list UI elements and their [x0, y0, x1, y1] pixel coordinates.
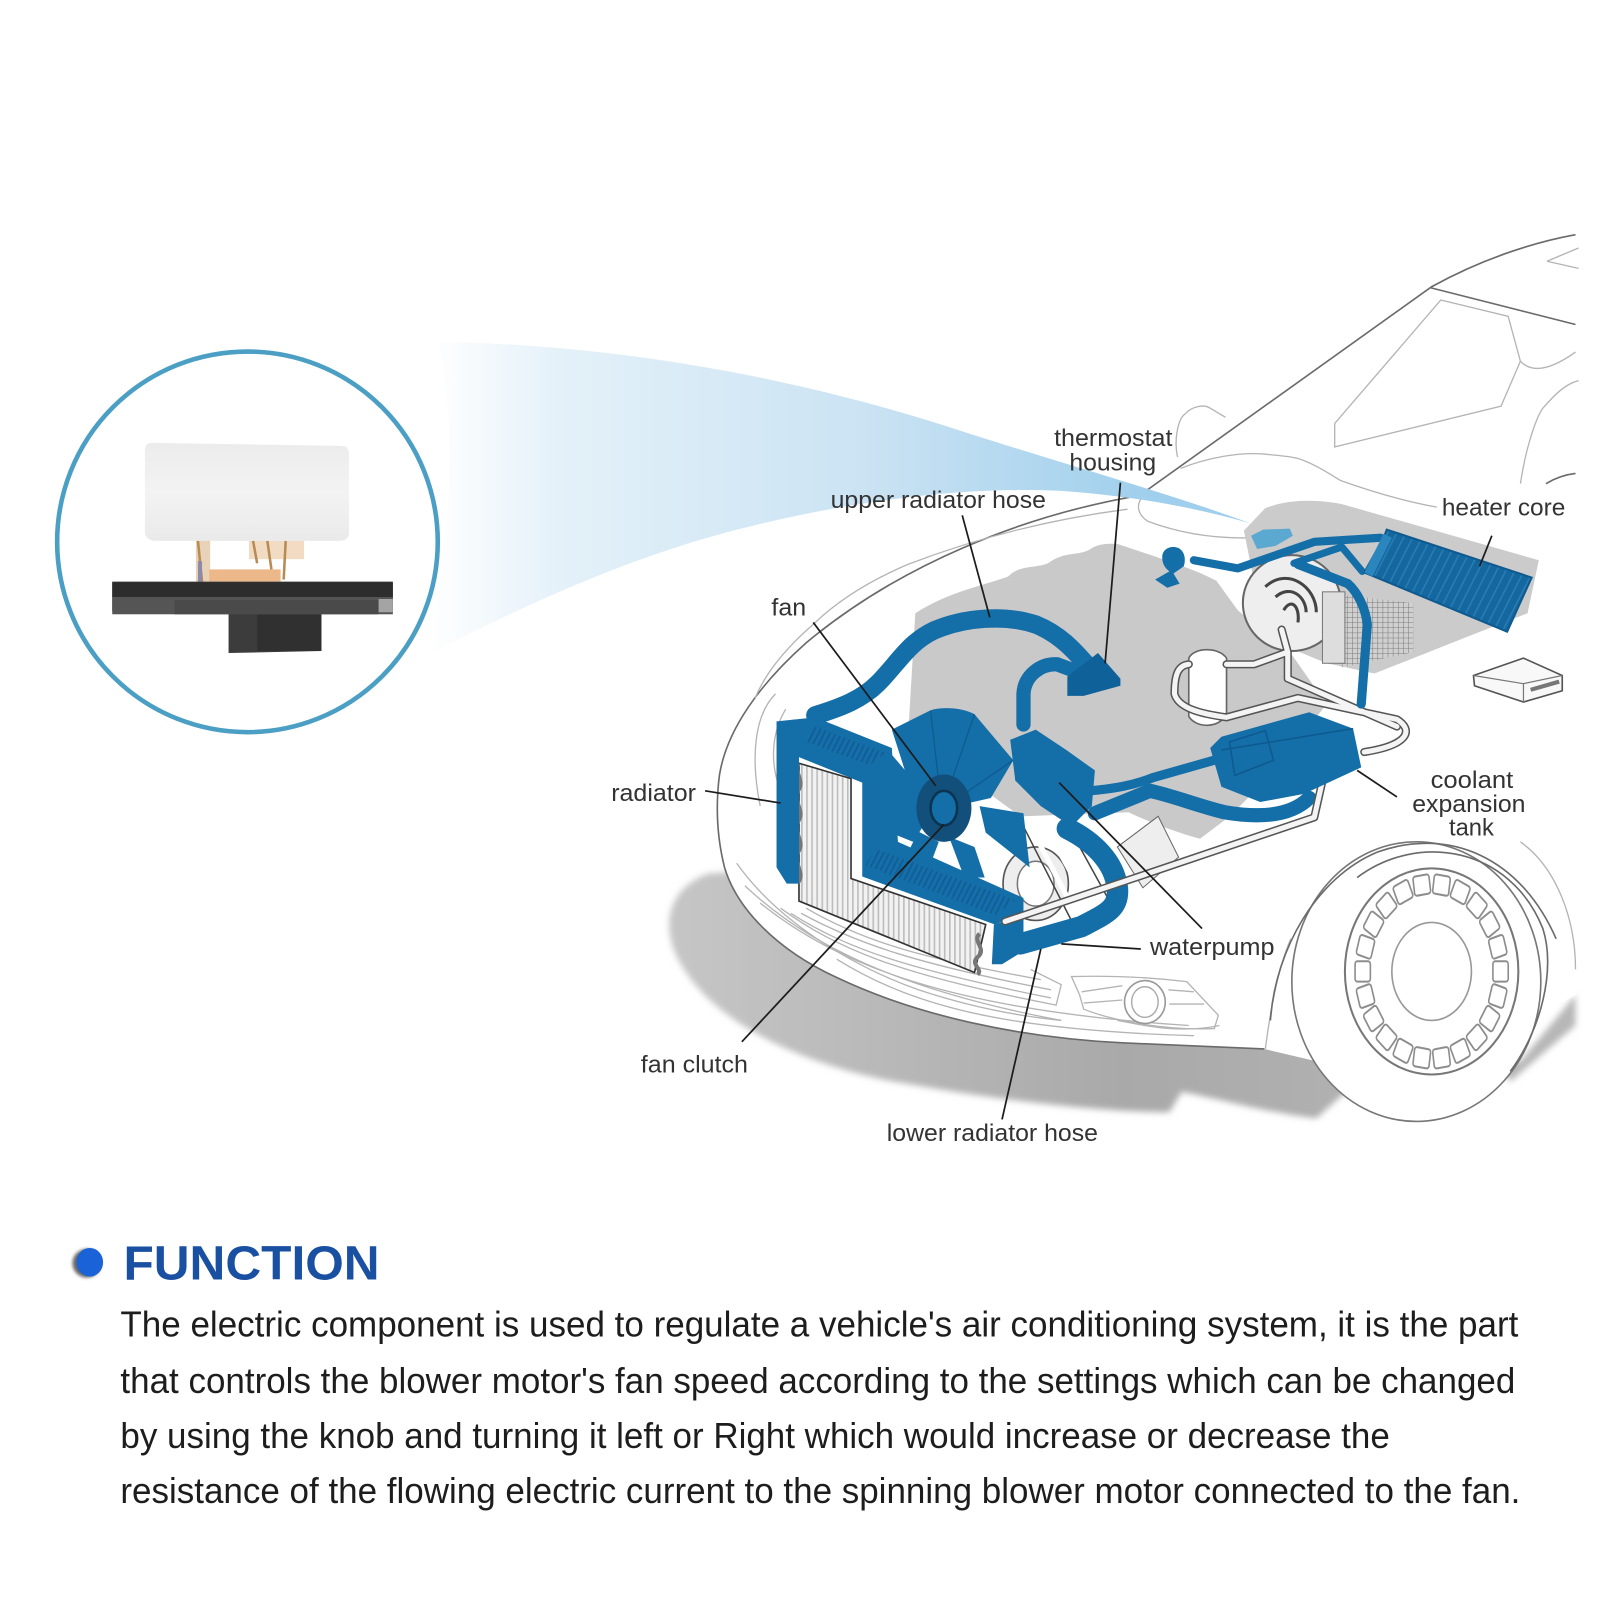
radiator core — [799, 763, 986, 972]
label: expansion: expansion — [1412, 791, 1526, 818]
second hose — [1023, 664, 1082, 724]
small bracket — [1251, 529, 1293, 549]
product: blower resistor — [112, 443, 393, 653]
coolant hoses — [1090, 760, 1309, 815]
thermostat housing — [1067, 653, 1120, 696]
label: tank: tank — [1449, 815, 1495, 842]
heading: FUNCTION — [123, 1238, 380, 1291]
white housing — [145, 443, 349, 541]
coolant expansion tank — [1210, 712, 1361, 802]
front wheel — [1270, 842, 1576, 1121]
engine bay water pump and pulley — [1003, 813, 1179, 931]
fan — [888, 708, 1030, 883]
section: function — [72, 1238, 1520, 1511]
heading bullet — [72, 1248, 103, 1278]
wheel rim slots — [1355, 874, 1508, 1069]
long chrome pipe — [1005, 767, 1326, 921]
blower motor — [1243, 555, 1345, 663]
body text: that controls the blower motor's fan speed according to the settings which can be changed — [120, 1361, 1515, 1401]
heater core — [1364, 530, 1532, 632]
radiator lobes — [796, 763, 981, 974]
receiver drier — [1189, 650, 1227, 725]
radiator frame — [777, 717, 1023, 964]
highlight beam from product to car — [420, 342, 1251, 658]
label: waterpump: waterpump — [1149, 934, 1274, 961]
panel: car diagram — [420, 232, 1579, 1147]
car body — [717, 232, 1576, 1082]
heater core hoses — [1194, 538, 1381, 704]
label: lower radiator hose: lower radiator hose — [887, 1120, 1098, 1147]
circle outline — [57, 352, 438, 732]
label: upper radiator hose: upper radiator hose — [831, 487, 1046, 514]
water pump body — [1010, 730, 1095, 827]
base plate — [112, 582, 393, 611]
upper radiator hose — [815, 618, 1090, 715]
lower radiator hose — [1020, 829, 1118, 944]
ground shadow — [669, 867, 1576, 1118]
firewall area — [1244, 501, 1539, 673]
body text: resistance of the flowing electric current to the spinning blower motor connected to the fan. — [120, 1471, 1520, 1511]
connector block — [229, 612, 321, 653]
engine block — [908, 544, 1327, 839]
leader lines — [705, 483, 1492, 1119]
label: coolant: coolant — [1431, 767, 1513, 794]
fog lamp — [1071, 976, 1218, 1029]
body text: by using the knob and turning it left or Right which would increase or decrease the — [120, 1416, 1390, 1456]
terminal pins and coil — [196, 539, 304, 582]
label: fan: fan — [771, 594, 806, 621]
air conditioning lines — [1174, 630, 1406, 752]
label: housing: housing — [1069, 449, 1156, 476]
label: fan clutch: fan clutch — [641, 1051, 748, 1078]
label: heater core: heater core — [1442, 494, 1565, 521]
body text — [120, 1305, 1520, 1511]
body text: The electric component is used to regulate a vehicle's air conditioning system, it is the part — [120, 1305, 1518, 1345]
label: radiator: radiator — [611, 780, 696, 807]
car outline — [717, 235, 1579, 1049]
label: thermostat housing: thermostat — [1054, 425, 1173, 452]
heater valve — [1155, 547, 1185, 588]
evaporator — [1342, 595, 1413, 667]
panel: product circle — [57, 352, 438, 732]
control module — [1473, 658, 1562, 702]
